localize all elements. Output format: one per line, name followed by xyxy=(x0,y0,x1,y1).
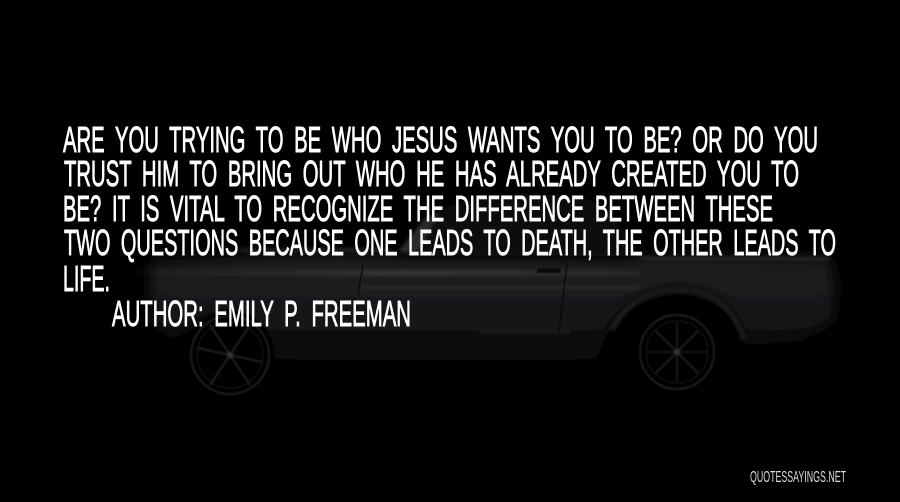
front wheel xyxy=(634,309,720,395)
author line: AUTHOR: EMILY P. FREEMAN xyxy=(112,293,411,334)
car roof and window xyxy=(395,194,640,256)
front wheel arch xyxy=(612,290,744,340)
rear wheel xyxy=(186,311,274,399)
car body xyxy=(150,254,835,376)
window highlight xyxy=(398,212,440,252)
body highlight streaks xyxy=(100,248,830,333)
car silhouette xyxy=(100,194,835,399)
quote text xyxy=(63,119,836,299)
quote text: LIFE. xyxy=(63,258,110,299)
door lines xyxy=(358,262,567,332)
door handle xyxy=(537,268,561,273)
